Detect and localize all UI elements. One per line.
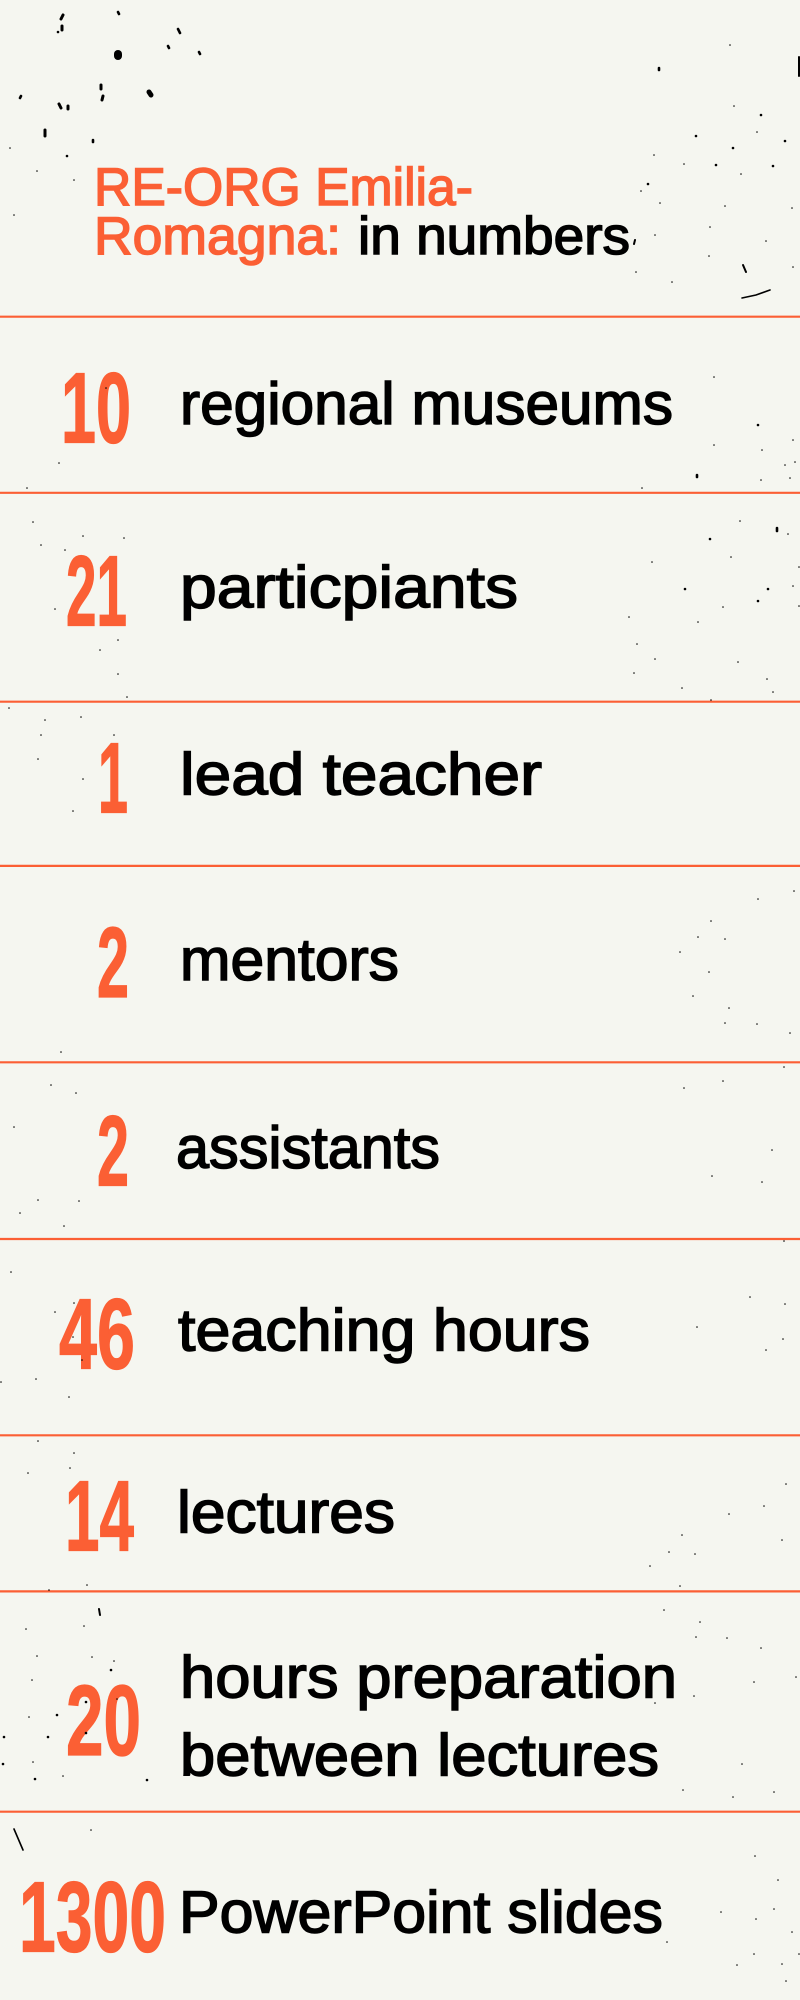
number: 2: 2 [97, 1096, 129, 1208]
label: lectures: lectures [177, 1480, 395, 1546]
row: hours preparation between lectures [66, 1645, 677, 1789]
number: 10: 10 [61, 352, 131, 464]
row: teaching hours [59, 1278, 590, 1390]
title: RE-ORG Emilia- [94, 158, 473, 217]
title: Romagna: [94, 207, 341, 266]
row: lectures [65, 1460, 395, 1572]
label: regional museums: regional museums [180, 371, 673, 437]
label: PowerPoint slides: PowerPoint slides [179, 1880, 663, 1946]
title [94, 158, 630, 266]
label: hours preparation between lectures [180, 1645, 677, 1789]
label: hours preparation between lectures: hours preparation [180, 1645, 677, 1711]
label: assistants: assistants [176, 1115, 440, 1181]
number: 1: 1 [98, 722, 128, 834]
row: regional museums [61, 352, 673, 464]
label: particpiants: particpiants [180, 554, 518, 620]
row: mentors [97, 907, 399, 1019]
row: lead teacher [98, 722, 542, 834]
row: participants [66, 536, 518, 648]
number: 2: 2 [97, 907, 129, 1019]
label: mentors: mentors [180, 927, 399, 993]
number: 1300: 1300 [19, 1862, 166, 1974]
number: 20: 20 [66, 1665, 141, 1777]
number: 14: 14 [65, 1460, 134, 1572]
title: in numbers [358, 207, 630, 266]
label: lead teacher: lead teacher [180, 742, 542, 808]
label: teaching hours: teaching hours [178, 1298, 590, 1364]
number: 21: 21 [66, 536, 127, 648]
number: 46: 46 [59, 1278, 135, 1390]
row: assistants [97, 1096, 440, 1208]
row: PowerPoint slides [19, 1862, 663, 1974]
label: hours preparation between lectures: between lectures [180, 1723, 659, 1789]
